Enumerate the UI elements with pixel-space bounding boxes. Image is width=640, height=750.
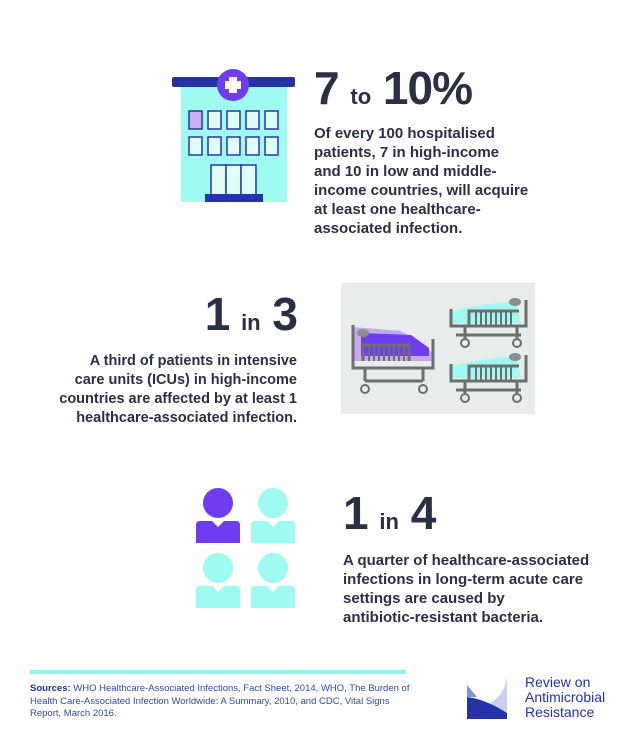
stat: 1 in 3: healthcare-associated infection. [76, 410, 297, 426]
sources: Sources: WHO Healthcare-Associated Infections, Fact Sheet, 2014, WHO, The Burden of [30, 683, 409, 694]
stat: 1 in 4 [343, 487, 589, 626]
logo: Antimicrobial [525, 689, 605, 705]
logo: Review on [525, 674, 590, 690]
sources: Health Care-Associated Infection Worldwide: A Summary, 2010, and CDC, Vital Signs [30, 696, 390, 706]
sources [30, 683, 410, 719]
stat: 1 in 3: care units (ICUs) in high-income [75, 372, 297, 388]
stat: 1 in 4: settings are caused by [343, 590, 505, 607]
sources: Report, March 2016. [30, 708, 117, 719]
icon: people [196, 488, 295, 608]
stat: 1 in 4: infections in long-term acute care [343, 571, 583, 588]
bed 1 purple patient [353, 325, 433, 393]
stat: 7 to 10%: income countries, will acquire [314, 182, 528, 199]
stat: 1 in 3: A third of patients in intensive [90, 353, 297, 369]
stat: 7 to 10% [314, 62, 528, 237]
logo [467, 674, 605, 720]
panel: hospital beds [341, 283, 535, 414]
bed 2 [451, 298, 526, 347]
stat: 7 to 10%: and 10 in low and middle- [314, 163, 497, 180]
stat: 7 to 10%: patients, 7 in high-income [314, 144, 499, 161]
stat: 1 in 3: countries are affected by at least 1 [59, 391, 297, 407]
stat: 1 in 4: antibiotic-resistant bacteria. [343, 609, 543, 626]
stat: 7 to 10%: Of every 100 hospitalised [314, 125, 495, 142]
stat: 7 to 10%: 7 to 10% [314, 62, 472, 114]
stat: 1 in 3: 1 in 3 [205, 288, 297, 340]
stat: 7 to 10%: at least one healthcare- [314, 201, 481, 218]
stat: 1 in 4: 1 in 4 [343, 487, 435, 539]
stat: 1 in 3 [59, 288, 297, 426]
stat: 7 to 10%: associated infection. [314, 220, 462, 237]
bed 3 [451, 353, 526, 402]
stat: 1 in 4: A quarter of healthcare-associated [343, 552, 589, 569]
logo: Resistance [525, 704, 594, 720]
icon: hospital [172, 69, 295, 202]
